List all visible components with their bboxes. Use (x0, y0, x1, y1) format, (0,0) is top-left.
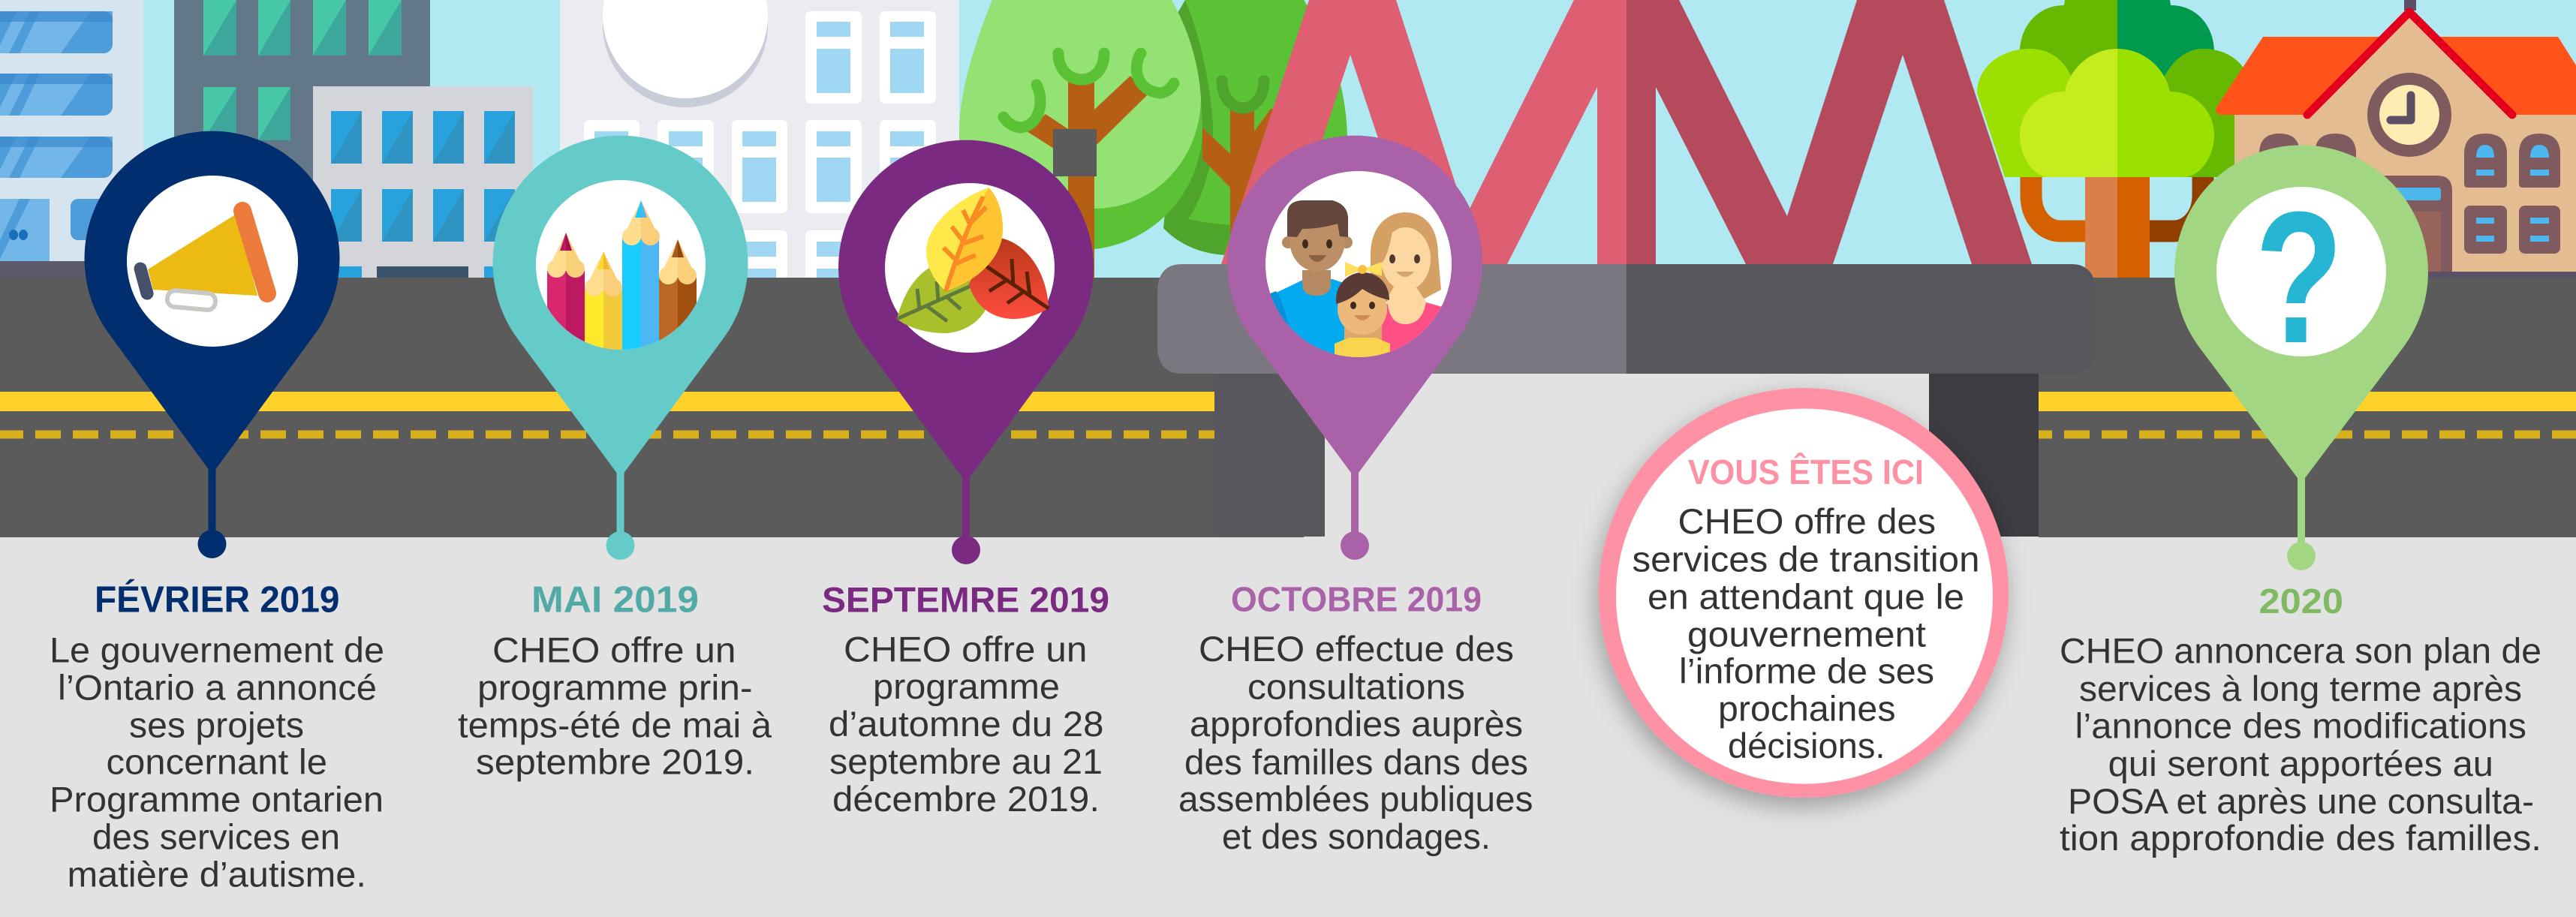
callout: vous êtes ici: CHEO offre des (1678, 501, 1936, 541)
column: septembre 2019: CHEO offre un (844, 629, 1087, 669)
column: octobre 2019: des familles dans des (1184, 742, 1528, 782)
column: février 2019: des services en (92, 817, 340, 857)
sky (0, 0, 2576, 279)
callout: vous êtes ici: prochaines (1718, 688, 1896, 728)
building: white with dome (560, 0, 959, 283)
pin: octobre 2019, family (1227, 136, 1482, 560)
column: mai 2019: CHEO offre un (492, 630, 736, 669)
callout: vous êtes ici: décisions. (1728, 726, 1885, 765)
column: octobre 2019: OCTOBRE 2019 (1231, 579, 1482, 618)
icon: megaphone (140, 211, 267, 311)
callout: vous êtes ici (1599, 388, 2009, 798)
column: février 2019: Le gouvernement de (50, 630, 384, 669)
tree: front light green (959, 0, 1202, 279)
column: septembre 2019: programme (873, 666, 1060, 706)
column: février 2019 (50, 580, 384, 894)
column: 2020: CHEO annoncera son plan de (2060, 630, 2541, 671)
column: octobre 2019: consultations (1247, 666, 1465, 706)
column: 2020: l’annonce des modifications (2075, 705, 2526, 746)
pin: mai 2019, pencils (493, 136, 748, 560)
icon: question mark: ? (2255, 173, 2343, 383)
road left (0, 278, 1304, 537)
column: octobre 2019: et des sondages. (1222, 816, 1491, 856)
column: 2020: 2020 (2259, 582, 2343, 621)
callout: vous êtes ici: services de transition (1632, 539, 1980, 579)
column: février 2019: FÉVRIER 2019 (95, 580, 339, 621)
column: septembre 2019 (822, 579, 1109, 819)
column: octobre 2019 (1178, 579, 1533, 856)
pin: 2020, question mark (2174, 145, 2428, 570)
building: school with clock (2216, 0, 2576, 279)
callout: vous êtes ici: l’informe de ses (1679, 651, 1934, 691)
bridge pillars (1214, 374, 2039, 537)
icon: family (1268, 200, 1445, 360)
bridge truss (1221, 0, 2032, 264)
column: mai 2019: MAI 2019 (531, 580, 699, 621)
column: février 2019: Programme ontarien (50, 779, 384, 819)
tree: right with lime canopy (1977, 0, 2248, 279)
pin: septembre 2019, leaves (838, 140, 1094, 564)
column: mai 2019: programme prin- (477, 667, 752, 707)
column: octobre 2019: assemblées publiques (1178, 779, 1533, 819)
pin: février 2019, megaphone (85, 131, 340, 558)
column: 2020: qui seront apportées au (2108, 744, 2493, 783)
callout: vous êtes ici: en attendant que le (1648, 576, 1964, 617)
column: 2020: POSA et après une consulta- (2068, 781, 2534, 821)
column: mai 2019 (458, 580, 772, 782)
callout: vous êtes ici: gouvernement (1687, 614, 1926, 654)
icon: pencils (547, 200, 697, 350)
building: dark green windows (174, 0, 430, 279)
bridge deck (1157, 264, 2096, 374)
column: février 2019: l’Ontario a annoncé (58, 667, 377, 707)
column: septembre 2019: d’automne du 28 (829, 704, 1103, 744)
icon: autumn leaves (897, 188, 1049, 333)
column: février 2019: concernant le (107, 742, 327, 782)
column: octobre 2019: CHEO effectue des (1199, 629, 1514, 669)
column: septembre 2019: SEPTEMRE 2019 (822, 579, 1109, 619)
column: février 2019: matière d’autisme. (68, 854, 366, 894)
column: 2020 (2060, 582, 2541, 858)
column: mai 2019: septembre 2019. (476, 742, 754, 782)
tree: back green (1163, 0, 1347, 279)
column: 2020: services à long terme après (2079, 669, 2522, 708)
building: grey blue windows (313, 86, 533, 279)
column: septembre 2019: septembre au 21 (829, 741, 1103, 781)
column: septembre 2019: décembre 2019. (832, 779, 1100, 819)
column: octobre 2019: approfondies auprès (1190, 704, 1523, 744)
column: mai 2019: temps-été de mai à (458, 705, 772, 744)
column: février 2019: ses projets (129, 705, 304, 744)
road right (2027, 278, 2576, 537)
callout: vous êtes ici: VOUS ÊTES ICI (1688, 452, 1924, 492)
building: blue glass (0, 0, 143, 279)
column: 2020: tion approfondie des familles. (2060, 818, 2541, 858)
